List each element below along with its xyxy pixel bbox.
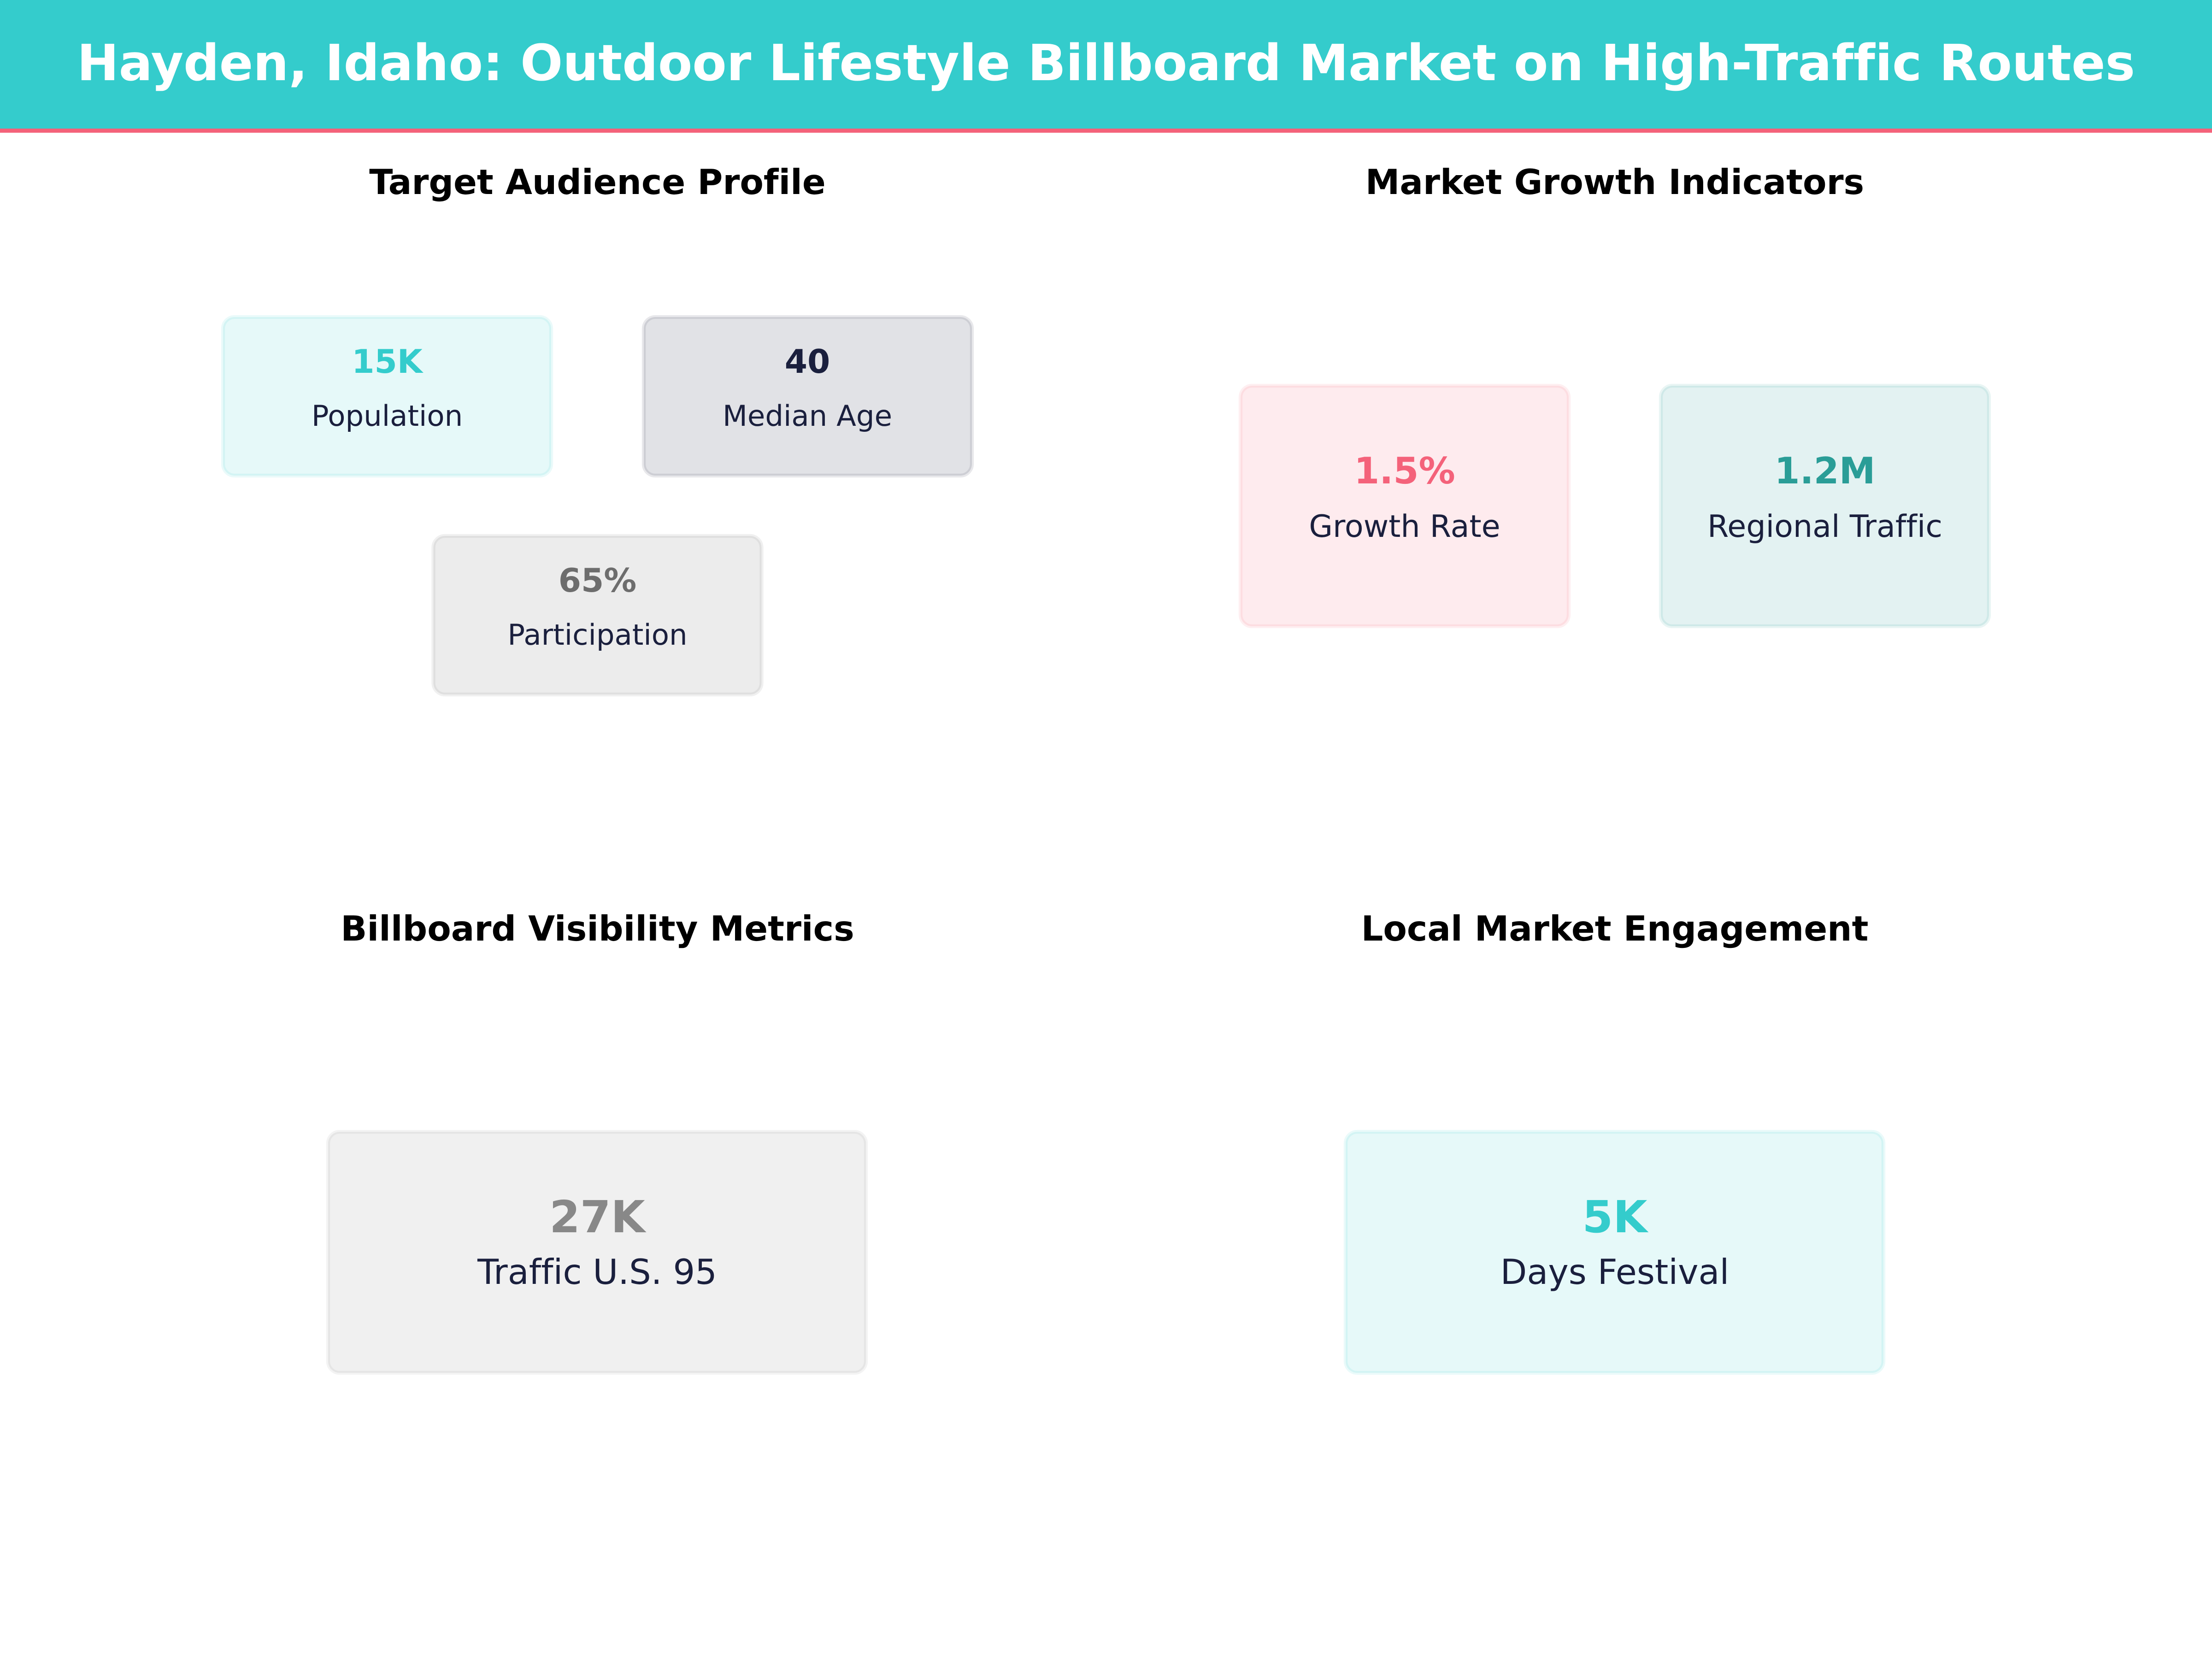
stat card: participation (433, 536, 761, 694)
panel: market growth indicators (1241, 162, 1989, 626)
stat card: regional traffic: Regional Traffic (1707, 508, 1942, 544)
panel: local market engagement (1346, 908, 1883, 1373)
stat card: days festival: Days Festival (1500, 1252, 1729, 1292)
stat card: regional traffic (1661, 386, 1989, 626)
stat card: traffic U.S. 95: Traffic U.S. 95 (477, 1252, 717, 1292)
stat card: median age: Median Age (723, 399, 892, 433)
stat card: participation: 65% (559, 561, 636, 600)
stat card: traffic U.S. 95: 27K (549, 1191, 647, 1243)
title: Hayden, Idaho: Outdoor Lifestyle Billboard Market on High-Traffic Routes (77, 34, 2135, 92)
panel: billboard visibility metrics (328, 908, 866, 1373)
stat card: median age: 40 (785, 342, 830, 381)
stat card: median age (644, 317, 972, 476)
heading: market growth indicators: Market Growth Indicators (1365, 162, 1864, 202)
stat card: growth rate: Growth Rate (1309, 508, 1500, 544)
stat card: population: Population (312, 399, 463, 433)
heading: billboard visibility metrics: Billboard Visibility Metrics (341, 908, 854, 949)
stat card: population: 15K (352, 342, 424, 381)
header banner (0, 0, 2212, 133)
stat card: days festival (1346, 1132, 1883, 1373)
panel: target audience profile (223, 162, 972, 694)
stat card: regional traffic: 1.2M (1774, 450, 1876, 492)
stat card: participation: Participation (507, 618, 688, 652)
stat card: traffic U.S. 95 (328, 1132, 866, 1373)
stat card: population (223, 317, 551, 476)
heading: target audience profile: Target Audience Profile (369, 162, 826, 202)
stat card: days festival: 5K (1583, 1191, 1649, 1243)
stat card: growth rate: 1.5% (1354, 450, 1455, 492)
stat card: growth rate (1241, 386, 1569, 626)
heading: local market engagement: Local Market Engagement (1361, 908, 1868, 949)
